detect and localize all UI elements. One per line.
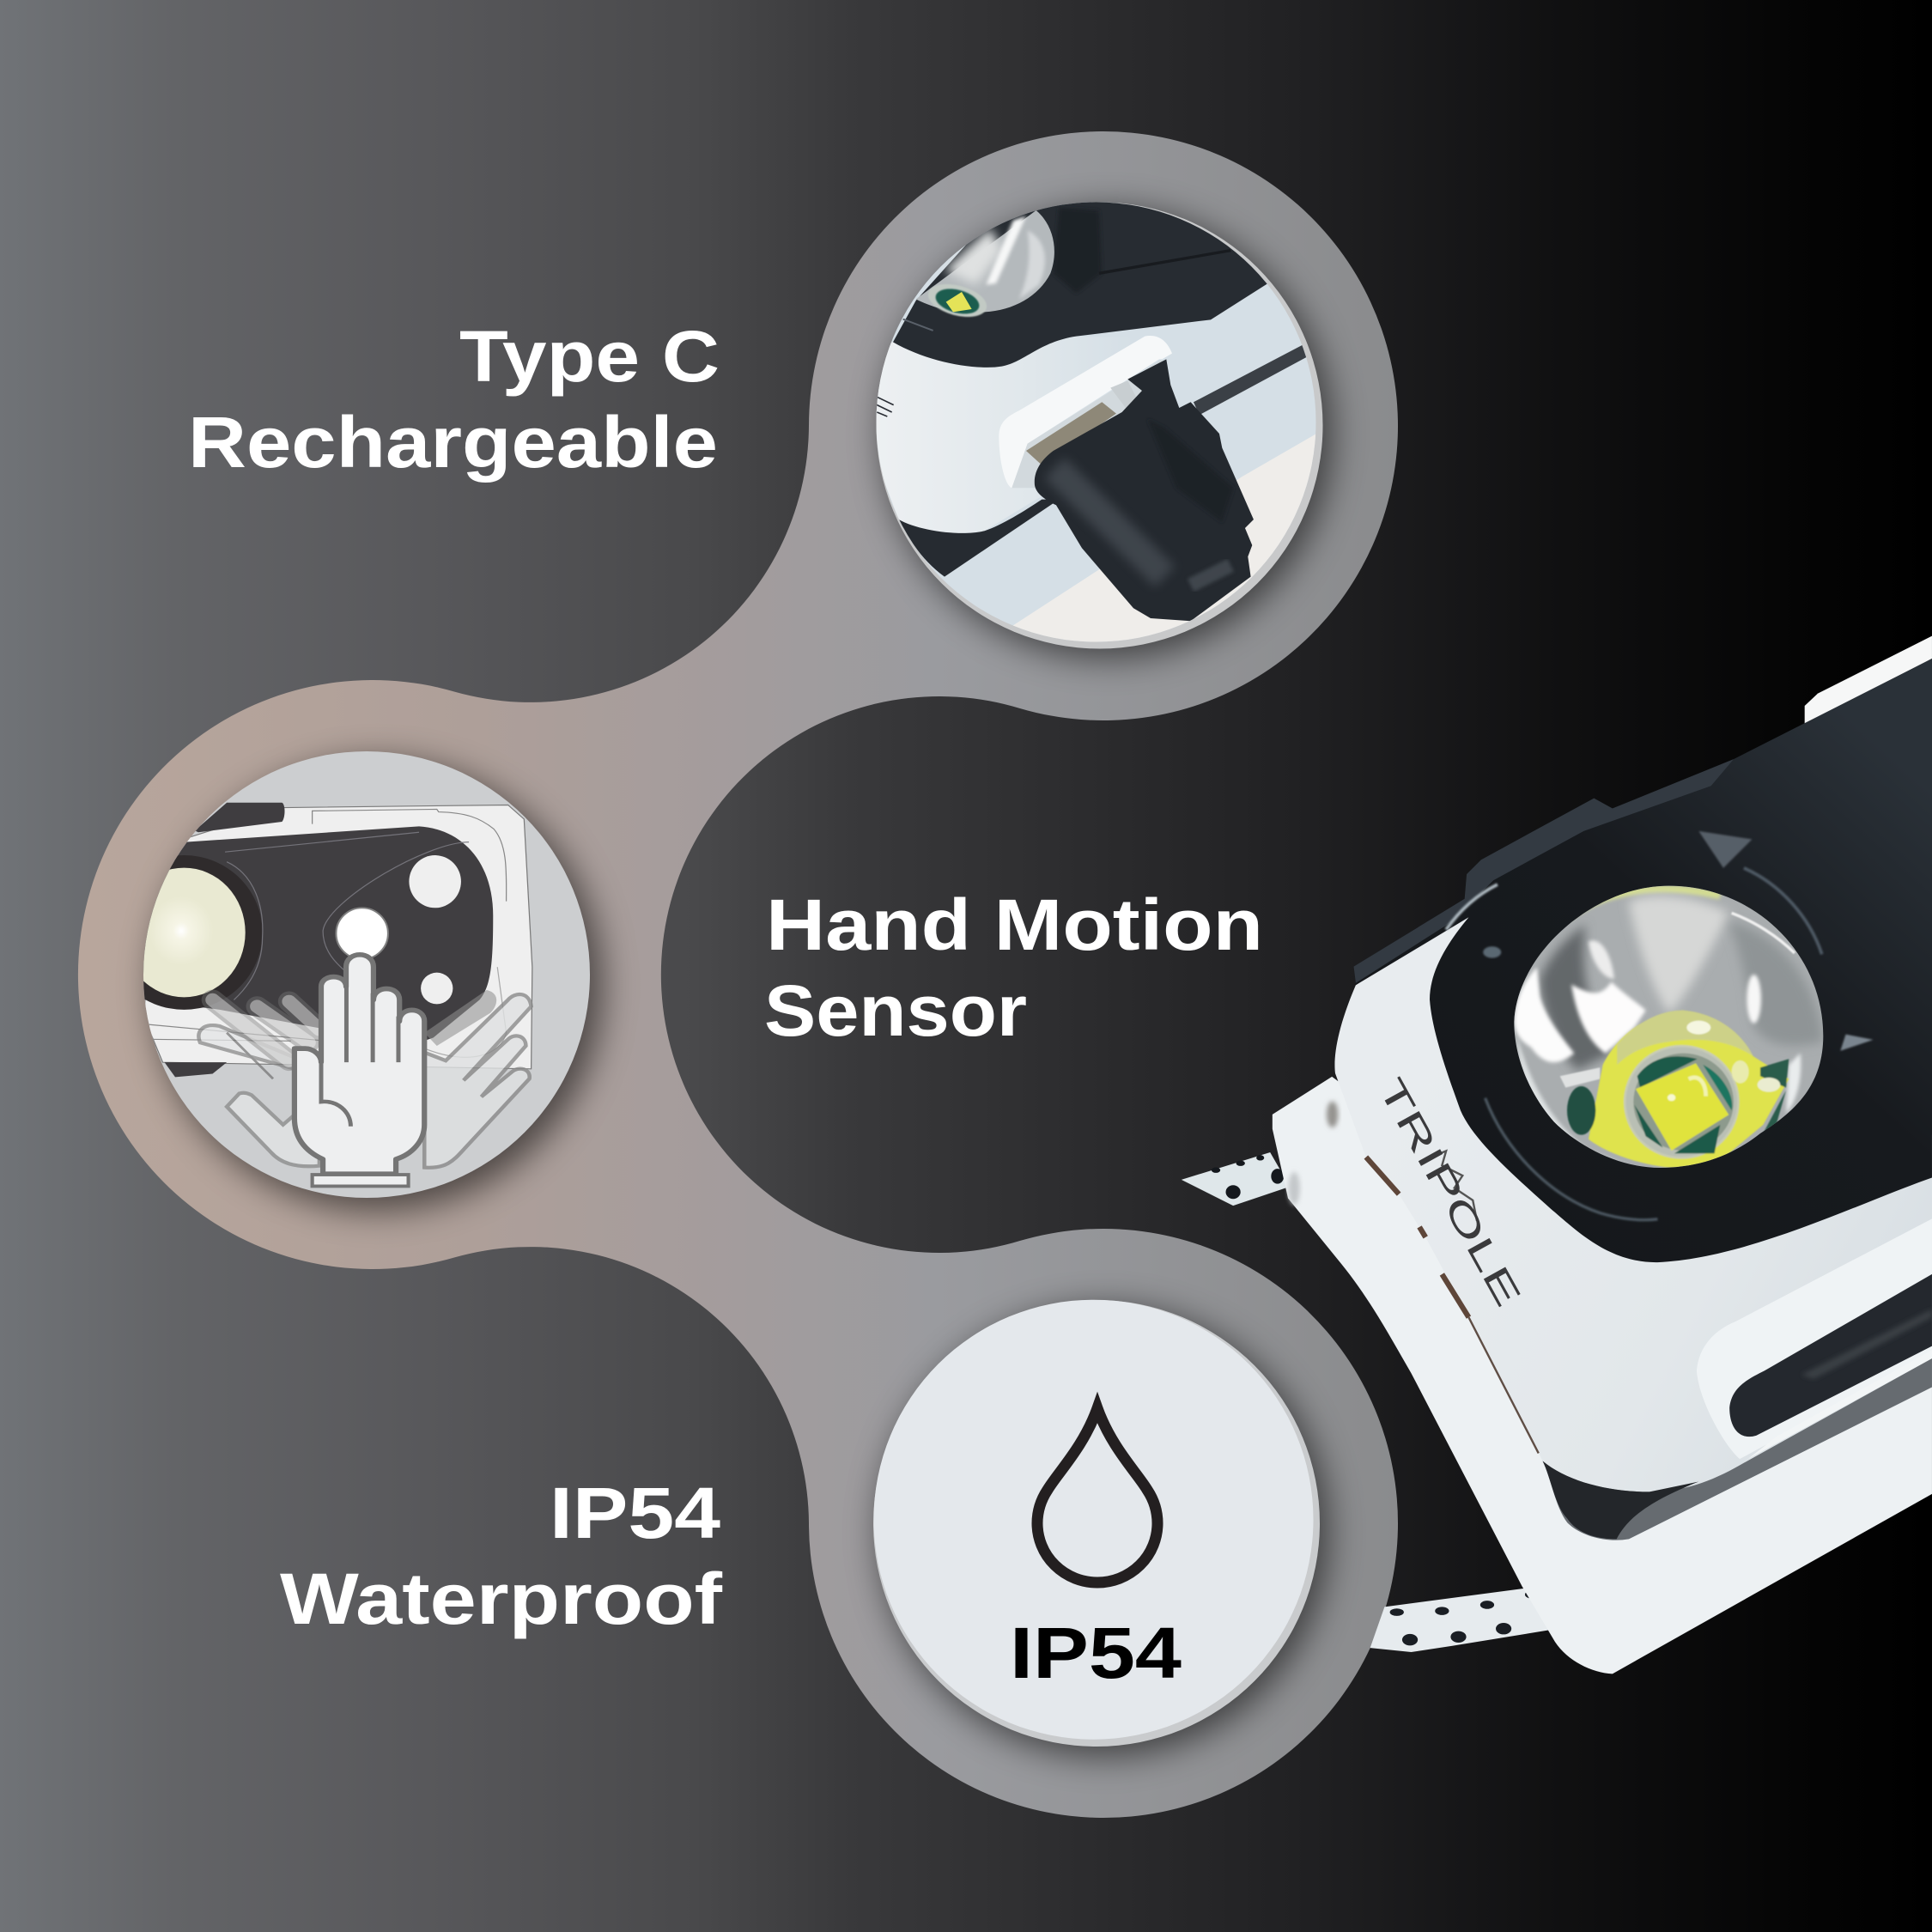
gap line between plate and housing <box>1366 1157 1468 1317</box>
headlamp lens and LED <box>1514 886 1823 1168</box>
circle face <box>874 1300 1314 1740</box>
heading: Hand Motion Sensor <box>764 884 1263 1051</box>
rubber cable head <box>1035 359 1254 621</box>
white port frame <box>999 336 1172 488</box>
heading: IP54 Waterproof: Waterproof <box>280 1558 723 1639</box>
back plate <box>1273 1077 1932 1674</box>
heading: IP54 Waterproof <box>280 1473 723 1639</box>
black upper body and bezel <box>1354 659 1932 1262</box>
USB-C cable photo <box>876 202 1325 651</box>
headlamp product photo <box>1182 636 1932 1674</box>
logo mountain mark <box>1436 1151 1477 1221</box>
connected three-circle panel <box>78 131 1398 1818</box>
strap cord bottom <box>1370 1589 1553 1652</box>
heading: Type C Rechargeable: Type C <box>459 316 720 397</box>
circle rim <box>873 1300 1320 1747</box>
heading: IP54 Waterproof: IP54 <box>550 1473 720 1553</box>
IP54 badge label: IP54 <box>1010 1613 1182 1693</box>
raised panel <box>1697 1218 1932 1459</box>
white top strip <box>1805 636 1932 724</box>
panel: type C connector circle <box>876 202 1333 659</box>
panel: hand motion sensor circle <box>131 738 624 1233</box>
TRIPOLE brand text on product: TRIPOLE <box>1370 1072 1529 1313</box>
icon: water drop <box>1037 1408 1157 1583</box>
metal connector <box>1026 402 1116 465</box>
ghost hand left <box>198 999 319 1166</box>
dark gap band <box>1543 1218 1932 1540</box>
central hand <box>295 955 424 1186</box>
heading: Type C Rechargeable <box>188 316 720 483</box>
heading: Hand Motion Sensor: Hand Motion <box>766 884 1263 965</box>
hand motion illustration <box>143 751 590 1198</box>
circle shadow <box>883 209 1333 659</box>
main housing <box>1334 889 1932 1492</box>
panel: IP54 waterproof circle <box>873 1300 1329 1757</box>
circle shadow <box>879 1307 1329 1757</box>
dark slot <box>1729 1274 1932 1437</box>
circle shadow <box>153 761 603 1211</box>
circle rim <box>876 203 1322 649</box>
heading: Type C Rechargeable: Rechargeable <box>188 402 718 483</box>
headlamp body <box>1273 636 1932 1674</box>
strap cord left <box>1182 1152 1290 1206</box>
small lens in cable photo <box>916 210 1054 323</box>
heading: Hand Motion Sensor: Sensor <box>764 970 1027 1051</box>
ghost hand right <box>424 990 532 1168</box>
